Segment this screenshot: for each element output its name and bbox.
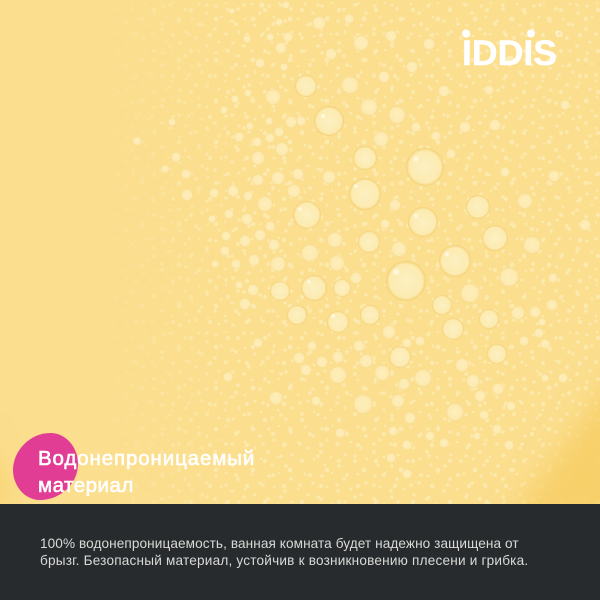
dark footer band [0,504,600,600]
darker corner shading [0,355,600,525]
description text [40,536,528,568]
heading [38,447,255,497]
heading: Водонепроницаемый [38,447,255,470]
heading: материал [38,474,134,497]
medium droplets [132,1,591,479]
large droplets [270,75,508,368]
logo: IDDIS: IDDIS [462,34,557,73]
description text: брызг. Безопасный материал, устойчив к возникновению плесени и грибка. [40,553,528,568]
description text: 100% водонепроницаемость, ванная комната будет надежно защищена от [40,536,519,551]
droplet highlights [298,114,449,318]
pink blob [13,433,78,500]
tiny droplets [124,2,600,504]
